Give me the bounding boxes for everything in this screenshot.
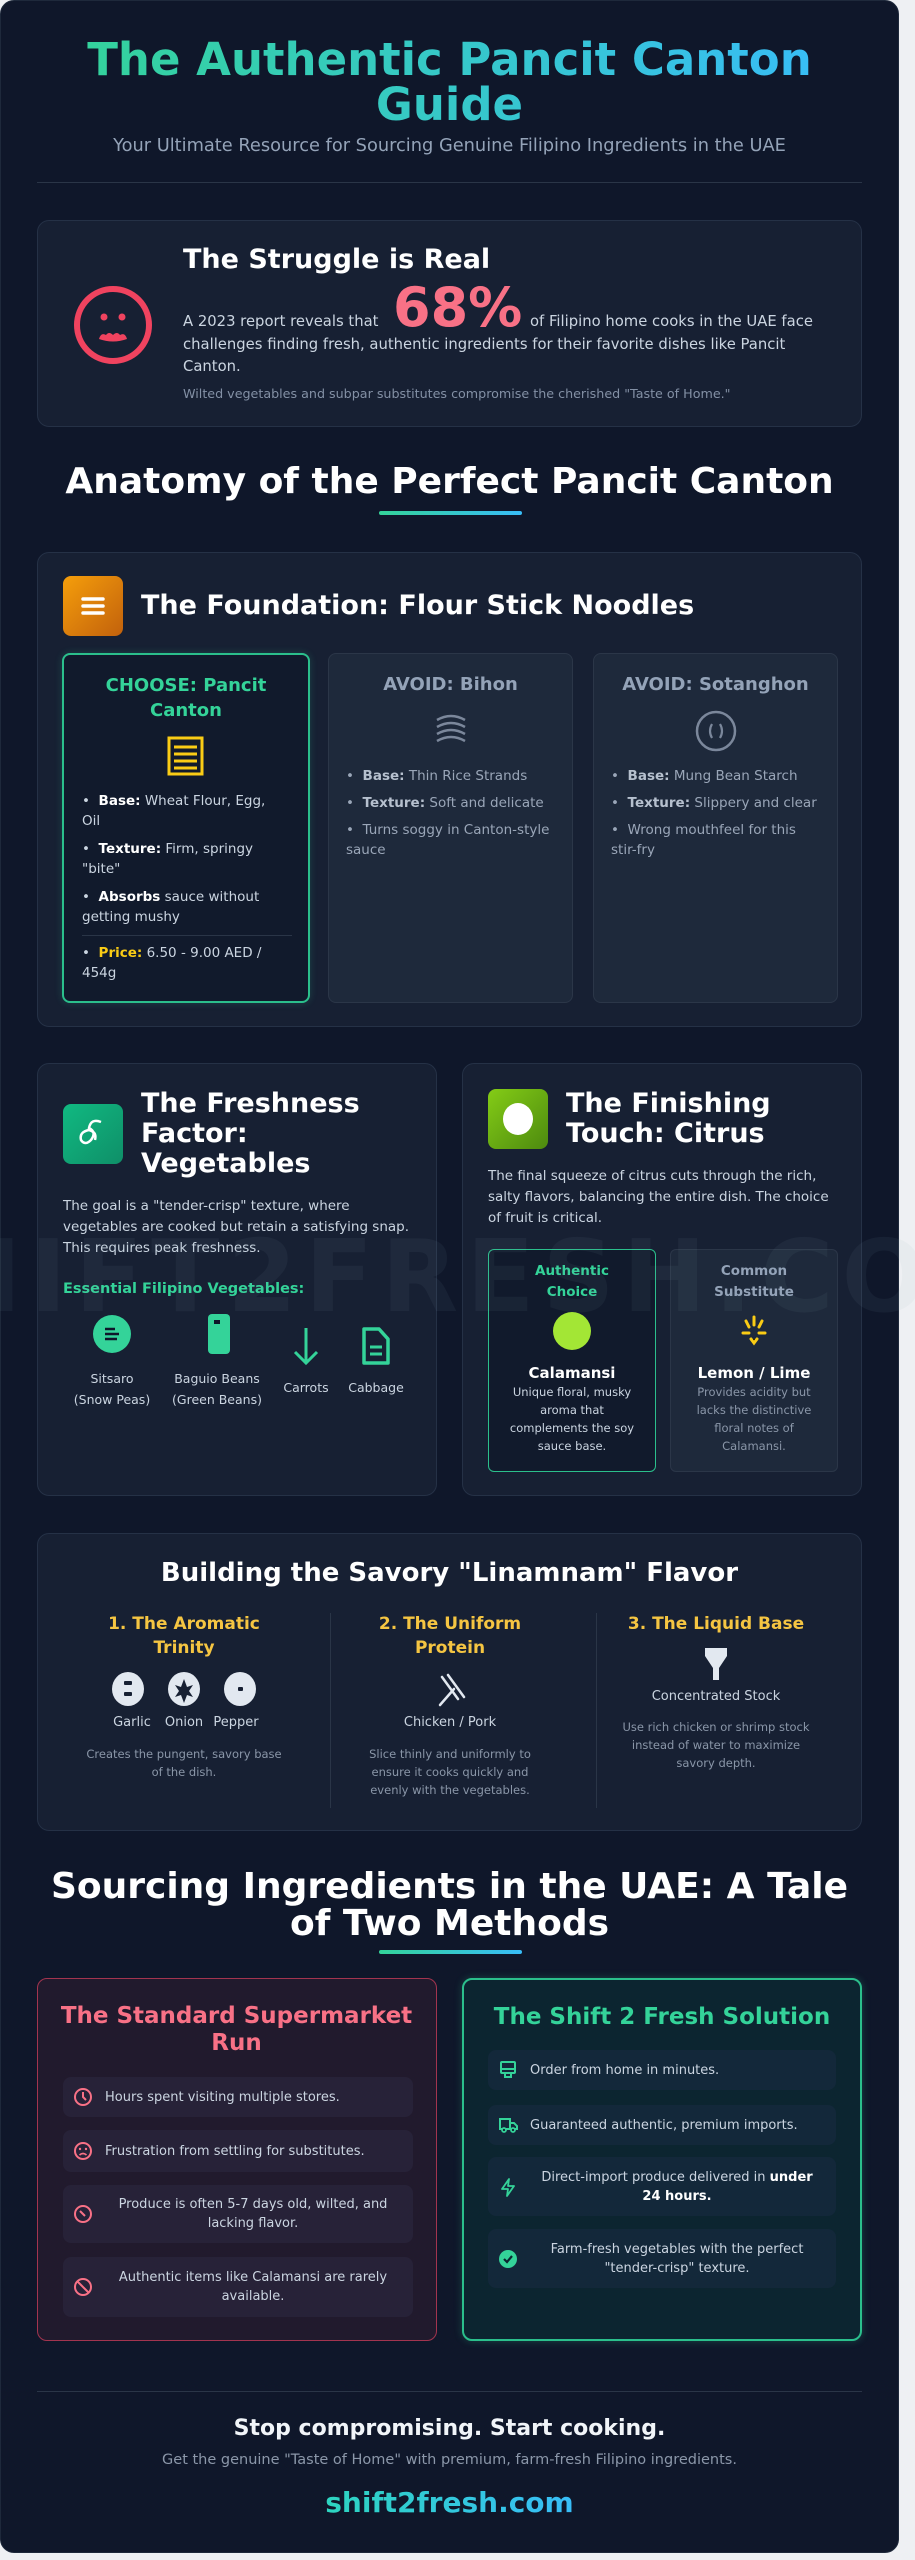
heading: [141, 1088, 360, 1179]
item: [488, 2105, 836, 2145]
footer: call to action: Stop compromising. Start cooking.: [234, 2416, 665, 2441]
title: The Authentic Pancit Canton: [87, 33, 812, 86]
card: avoid bihon: • Texture: Soft and delicate: [346, 795, 544, 811]
column: uniform protein: [369, 1614, 531, 1797]
item: Guaranteed authentic, premium imports.: [530, 2118, 798, 2132]
card: lemon lime: floral notes of: [714, 1421, 794, 1435]
card: avoid sotanghon: stir-fry: [611, 842, 655, 858]
column: uniform protein: ensure it cooks quickly and: [372, 1765, 528, 1779]
card: avoid bihon: AVOID: Bihon: [383, 674, 518, 695]
item: Authentic items like Calamansi are rarely: [119, 2270, 387, 2285]
column: uniform protein: Protein: [415, 1638, 485, 1658]
heading: The Standard Supermarket: [61, 2003, 412, 2029]
card: choose pancit canton: • Base: Wheat Flour, Egg,: [82, 793, 265, 809]
column: uniform protein: evenly with the vegetables.: [370, 1783, 530, 1797]
item: [63, 2257, 413, 2317]
text: The goal is a "tender-crisp" texture, where: [63, 1198, 350, 1214]
item: lacking flavor.: [208, 2216, 298, 2231]
column: liquid base: instead of water to maximize: [632, 1738, 800, 1752]
footer: call to action: [162, 2416, 737, 2468]
column: aromatic trinity: Trinity: [153, 1638, 215, 1658]
title: Guide: [376, 78, 523, 131]
panel: the struggle is real: [37, 220, 862, 427]
card: avoid sotanghon: • Wrong mouthfeel for this: [611, 822, 796, 838]
item: 24 hours.: [642, 2188, 712, 2204]
column: liquid base: 3. The Liquid Base: [628, 1614, 804, 1634]
card: avoid bihon: sauce: [346, 842, 386, 858]
text: salty flavors, balancing the entire dish. The choice: [488, 1189, 829, 1205]
card: calamansi: Choice: [547, 1284, 597, 1300]
heading: The Foundation: Flour Stick Noodles: [141, 590, 694, 621]
card: choose pancit canton: 454g: [82, 965, 116, 981]
column: uniform protein: 2. The Uniform: [379, 1614, 521, 1634]
note: Wilted vegetables and subpar substitutes compromise the cherished "Taste of Home.": [183, 386, 730, 401]
panel: shift 2 fresh solution: [462, 1978, 862, 2341]
card: lemon lime: Provides acidity but: [697, 1385, 811, 1399]
veg: cabbage: Cabbage: [348, 1380, 404, 1395]
item: Farm-fresh vegetables with the perfect: [551, 2242, 803, 2256]
card: calamansi: Calamansi: [529, 1364, 615, 1382]
item: [488, 2050, 836, 2090]
card: choose pancit canton: "bite": [82, 861, 120, 877]
column: aromatic trinity: 1. The Aromatic: [108, 1614, 260, 1634]
card: lemon lime: Calamansi.: [722, 1439, 786, 1453]
heading: Factor:: [141, 1118, 248, 1149]
panel: linamnam flavor: [37, 1533, 862, 1831]
subtitle: Your Ultimate Resource for Sourcing Genuine Filipino Ingredients in the UAE: [113, 135, 786, 156]
heading: sourcing: Sourcing Ingredients in the UAE: A Tale: [51, 1866, 848, 1907]
column: aromatic trinity: Pepper: [213, 1715, 259, 1730]
card: choose pancit canton: • Price: 6.50 - 9.00 AED /: [82, 945, 261, 961]
card: avoid sotanghon: • Base: Mung Bean Starch: [611, 768, 798, 784]
card: choose pancit canton: Oil: [82, 813, 100, 829]
heading: The Finishing: [566, 1088, 771, 1119]
card: choose pancit canton: • Texture: Firm, springy: [82, 841, 253, 857]
veg: sitsaro: [74, 1315, 150, 1407]
column: liquid base: savory depth.: [676, 1756, 756, 1770]
icon: noodle pack: [168, 736, 204, 776]
column: aromatic trinity: Creates the pungent, savory base: [86, 1747, 282, 1761]
card: avoid sotanghon: AVOID: Sotanghon: [622, 674, 809, 695]
icon: pea pod: [63, 1104, 123, 1164]
card: avoid bihon: • Turns soggy in Canton-style: [346, 822, 549, 838]
text: [488, 1168, 829, 1226]
card: calamansi: sauce base.: [538, 1439, 606, 1453]
item: Direct-import produce delivered in under: [541, 2170, 813, 2184]
heading: The Shift 2 Fresh Solution: [494, 2004, 830, 2030]
heading: Building the Savory "Linamnam" Flavor: [161, 1558, 738, 1588]
item: available.: [222, 2289, 284, 2304]
heading: [566, 1088, 771, 1149]
veg: baguio beans: [172, 1314, 262, 1407]
text: This requires peak freshness.: [63, 1240, 261, 1256]
item: "tender-crisp" texture.: [604, 2260, 750, 2276]
card: calamansi: Authentic: [535, 1263, 609, 1279]
item: [63, 2130, 413, 2172]
heading: sourcing: of Two Methods: [290, 1903, 609, 1944]
card: lemon lime: lacks the distinctive: [697, 1403, 811, 1417]
icon: noodles: [63, 576, 123, 636]
heading: The Struggle is Real: [183, 244, 490, 275]
veg: baguio beans: Baguio Beans: [174, 1371, 260, 1386]
stat text: A 2023 report reveals that: [183, 313, 378, 330]
text: [62, 1198, 409, 1256]
heading: [61, 2003, 412, 2056]
heading: sourcing: [51, 1866, 848, 1944]
panel: the struggle is real: 68%: [393, 276, 522, 339]
item: Produce is often 5-7 days old, wilted, and: [119, 2197, 387, 2212]
column: uniform protein: Chicken / Pork: [404, 1715, 496, 1730]
column: aromatic trinity: [86, 1614, 282, 1779]
text: of fruit is critical.: [488, 1210, 602, 1226]
icon: sad face: [74, 286, 152, 364]
column: liquid base: Concentrated Stock: [652, 1689, 780, 1704]
item: Frustration from settling for substitutes.: [105, 2144, 365, 2158]
heading: Vegetables: [141, 1148, 310, 1179]
footer: website: shift2fresh.com: [325, 2486, 574, 2519]
veg: carrots: Carrots: [283, 1380, 329, 1395]
heading: anatomy: Anatomy of the Perfect Pancit Canton: [65, 461, 834, 502]
text: The final squeeze of citrus cuts through the rich,: [488, 1168, 816, 1184]
column: liquid base: Use rich chicken or shrimp stock: [622, 1720, 810, 1734]
item: [63, 2077, 413, 2117]
panel: supermarket run: [37, 1978, 437, 2341]
column: aromatic trinity: Garlic: [113, 1715, 151, 1730]
card: lemon lime: Lemon / Lime: [698, 1364, 810, 1382]
footer: call to action: Get the genuine "Taste of Home" with premium, farm-fresh Filipino ingredients.: [162, 2452, 737, 2468]
panel: the struggle is real: of Filipino home cooks in the UAE face: [530, 313, 813, 330]
panel: the struggle is real: Canton.: [183, 358, 241, 375]
column: liquid base: [622, 1614, 810, 1770]
heading: Run: [211, 2030, 262, 2056]
column: aromatic trinity: Onion: [165, 1715, 203, 1730]
card: avoid sotanghon: • Texture: Slippery and clear: [611, 795, 817, 811]
card: choose pancit canton: [62, 653, 310, 1003]
card: lemon lime: [670, 1249, 838, 1472]
card: choose pancit canton: CHOOSE: Pancit: [106, 675, 266, 696]
panel: freshness vegetables: [37, 1063, 437, 1496]
veg: sitsaro: (Snow Peas): [74, 1392, 150, 1407]
item: Order from home in minutes.: [530, 2062, 719, 2078]
veg: cabbage: [348, 1327, 404, 1395]
item: [63, 2185, 413, 2243]
title: [60, 37, 839, 127]
card: lemon lime: Common: [721, 1263, 787, 1279]
card: choose pancit canton: Canton: [150, 700, 222, 721]
icon: waves: [436, 714, 466, 742]
veg: carrots: [283, 1328, 329, 1395]
item: Hours spent visiting multiple stores.: [105, 2090, 340, 2104]
subheading: Essential Filipino Vegetables:: [63, 1281, 304, 1297]
veg: baguio beans: (Green Beans): [172, 1392, 262, 1407]
icon: citrus: [488, 1089, 548, 1149]
column: aromatic trinity: of the dish.: [152, 1765, 216, 1779]
item: [488, 2157, 836, 2216]
veg: sitsaro: Sitsaro: [90, 1371, 134, 1386]
card: calamansi: [488, 1249, 656, 1472]
card: avoid bihon: [328, 653, 573, 1003]
column: uniform protein: Slice thinly and uniformly to: [369, 1747, 531, 1761]
heading: Touch: Citrus: [566, 1118, 765, 1149]
card: calamansi: aroma that: [540, 1403, 604, 1417]
card: lemon lime: Substitute: [714, 1284, 794, 1300]
card: choose pancit canton: • Absorbs sauce without: [82, 889, 259, 905]
icon: circle: [696, 710, 736, 752]
panel: the struggle is real: challenges finding fresh, authentic ingredients for their favorite dishes like Pancit: [183, 336, 785, 353]
card: avoid sotanghon: [593, 653, 838, 1003]
panel: foundation noodles: [37, 552, 862, 1027]
item: [488, 2229, 836, 2288]
card: avoid bihon: • Base: Thin Rice Strands: [346, 768, 527, 784]
card: calamansi: complements the soy: [510, 1421, 634, 1435]
text: vegetables are cooked but retain a satisfying snap.: [63, 1219, 409, 1235]
panel: finishing citrus: [462, 1063, 862, 1496]
heading: The Freshness: [141, 1088, 360, 1119]
card: choose pancit canton: getting mushy: [82, 909, 180, 925]
card: calamansi: Unique floral, musky: [513, 1385, 631, 1399]
